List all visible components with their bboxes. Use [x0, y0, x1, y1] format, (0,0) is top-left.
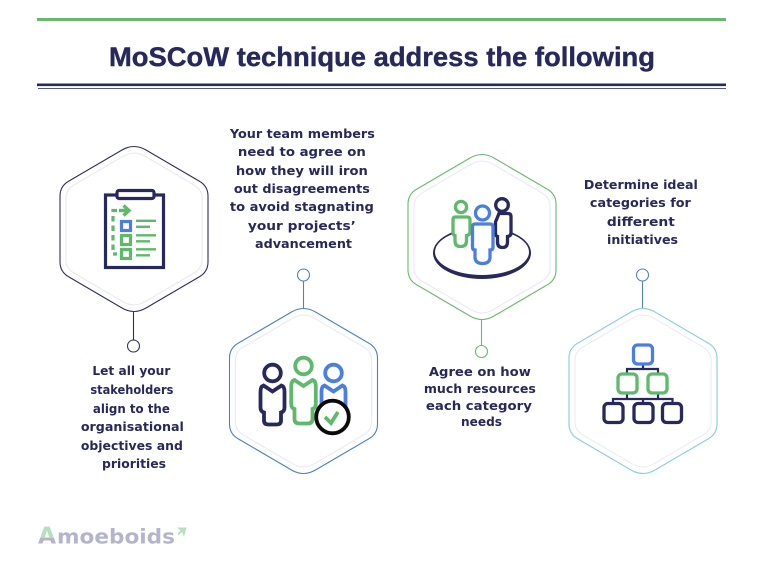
- text: team agreement: advancement: [255, 237, 352, 251]
- text: ideal categories: initiatives: [607, 233, 678, 247]
- connector: ideal categories: [636, 269, 648, 308]
- text: stakeholders: align to the: [93, 402, 170, 416]
- text: resource agreement: Agree on how: [429, 365, 531, 379]
- text: stakeholders: priorities: [102, 457, 166, 471]
- connector: team agreement: [298, 269, 310, 308]
- hexagon frame: resource agreement: [408, 154, 556, 320]
- text: team agreement: need to agree on: [238, 145, 366, 159]
- text: team agreement: to avoid stagnating: [230, 200, 374, 214]
- hexagon frame: stakeholders: [60, 146, 208, 312]
- connector: stakeholders: [128, 312, 140, 352]
- icon: hierarchy chart: [604, 345, 682, 422]
- logo: Amoeboids: A: [38, 524, 56, 550]
- text: stakeholders: Let all your: [92, 364, 171, 378]
- text: ideal categories: Determine ideal: [584, 178, 698, 192]
- text: resource agreement: each category: [426, 399, 532, 413]
- panel: ideal categories: [569, 178, 717, 474]
- icon: people on a platform: [433, 199, 531, 279]
- logo: Amoeboids: moeboids: [57, 524, 175, 548]
- icon: clipboard checklist: [106, 190, 164, 268]
- text: team agreement: Your team members: [229, 127, 375, 141]
- text: stakeholders: organisational: [81, 420, 184, 434]
- icon: team with check mark: [260, 358, 349, 433]
- panel: team agreement: [229, 127, 379, 474]
- text: team agreement: out disagreements: [234, 182, 370, 196]
- hexagon frame: ideal categories: [569, 308, 717, 474]
- logo: Amoeboids: [38, 524, 186, 550]
- text: resource agreement: much resources: [424, 382, 536, 396]
- panel: resource agreement: [408, 154, 556, 429]
- panel: stakeholders alignment: [60, 146, 208, 471]
- text: ideal categories: different: [607, 215, 675, 229]
- text: ideal categories: categories for: [590, 196, 692, 210]
- text: team agreement: your projects’: [248, 219, 356, 233]
- text: stakeholders: stakeholders: [90, 383, 173, 397]
- text: team agreement: how they will iron: [236, 164, 368, 178]
- hexagon frame: team agreement: [230, 308, 378, 474]
- connector: resource agreement: [476, 320, 488, 358]
- text: resource agreement: needs: [461, 415, 502, 429]
- title: MoSCoW technique address the following: [109, 42, 655, 72]
- text: stakeholders: objectives and: [81, 439, 183, 453]
